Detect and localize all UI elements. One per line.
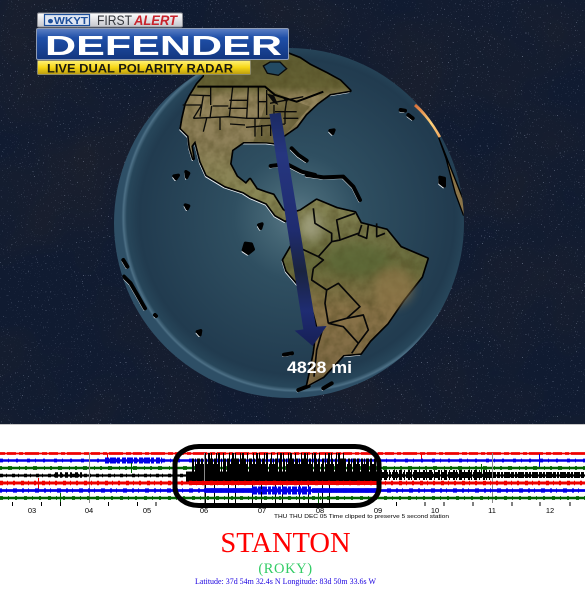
Defender strip: [36, 28, 288, 61]
hour labels: 10: [431, 506, 439, 515]
station logo banner: [36, 13, 288, 76]
chart caption: THU THU DEC 05 Time clipped to preserve 5 second station: [274, 514, 449, 520]
First Alert strip: ALERT: [133, 13, 179, 28]
trace: blue sixth: [0, 489, 585, 492]
hour labels: 04: [85, 506, 93, 515]
hour labels: 08: [316, 506, 324, 515]
hour labels: 12: [546, 506, 554, 515]
First Alert strip: ●WKYT: [47, 15, 89, 27]
Live radar strip: LIVE DUAL POLARITY RADAR: [47, 62, 233, 76]
darker eastern North America: [253, 90, 310, 143]
globe ocean sphere: [114, 48, 464, 398]
Hudson bay water: [263, 62, 287, 75]
Defender strip: DEFENDER: [45, 30, 282, 61]
hour labels: [28, 506, 554, 515]
hour labels: 05: [143, 506, 151, 515]
trace: green seventh: [0, 493, 585, 503]
distance arrow: [269, 113, 327, 346]
distance label: 4828 mi: [287, 359, 352, 377]
First Alert strip: [38, 13, 182, 28]
trace: red top: [0, 453, 585, 460]
station name: STANTON: [220, 528, 351, 559]
station coordinates: Latitude: 37d 54m 32.4s N Longitude: 83d 50m 33.6s W: [195, 577, 376, 586]
hour labels: 11: [488, 506, 496, 515]
land masses of the Americas: [122, 47, 470, 392]
Africa limb: [438, 136, 464, 216]
seismic burst solid core: [186, 472, 380, 482]
globe: [114, 47, 470, 398]
Amazon green patch: [332, 244, 384, 274]
decaying coda right of the burst: [378, 472, 585, 478]
Great Lakes: [267, 93, 288, 105]
hour gridlines: [90, 453, 492, 503]
trace: blue second: [0, 454, 585, 467]
trace: green third: [0, 463, 585, 473]
US state borders: [183, 87, 303, 137]
seismic burst spikes up: [192, 458, 378, 482]
panel: starfield background: [0, 0, 585, 425]
hour labels: 09: [374, 506, 382, 515]
limb sun glare: [415, 105, 440, 137]
minute ticks: [12, 502, 570, 506]
hour labels: 03: [28, 506, 36, 515]
station code: (ROKY): [258, 561, 313, 577]
South American borders: [290, 208, 385, 377]
eastern Brazil tan patch: [373, 267, 413, 307]
trace: red fifth: [0, 478, 585, 489]
seismograph chart: [0, 453, 585, 520]
hour labels: 06: [200, 506, 208, 515]
seismic burst spikes down: [205, 475, 345, 505]
highlight around seismic event: [175, 446, 379, 506]
trace: black fourth with seismic burst: [0, 468, 585, 490]
Canada US border: [197, 87, 323, 102]
hour labels: 07: [258, 506, 266, 515]
First Alert strip: FIRST: [97, 13, 133, 28]
Colombia pale patch: [301, 213, 322, 241]
